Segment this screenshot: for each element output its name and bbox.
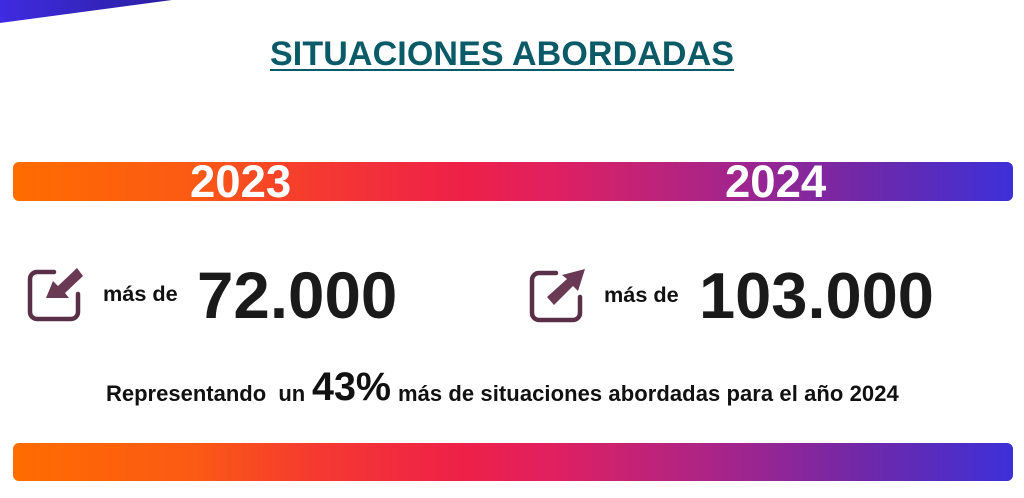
title: SITUACIONES ABORDADAS: [270, 35, 734, 73]
label: más de 2024: más de: [604, 282, 679, 307]
summary sentence: Representando un: [106, 381, 305, 406]
value: 72.000: 72.000: [197, 259, 397, 332]
icon: arrow out of box: [530, 269, 585, 322]
value: 103.000: 103.000: [699, 259, 934, 332]
summary sentence: 43%: [312, 365, 391, 409]
label: más de 2023: más de: [103, 281, 178, 306]
corner accent: [0, 0, 172, 23]
summary sentence: [106, 365, 899, 409]
year 2024: 2024: [725, 156, 826, 207]
icon: arrow into box: [28, 268, 83, 322]
bottom banner: [13, 443, 1013, 481]
year 2023: 2023: [190, 156, 291, 207]
year banner: [13, 162, 1013, 201]
summary sentence: más de situaciones abordadas para el año 2024: [398, 381, 899, 406]
